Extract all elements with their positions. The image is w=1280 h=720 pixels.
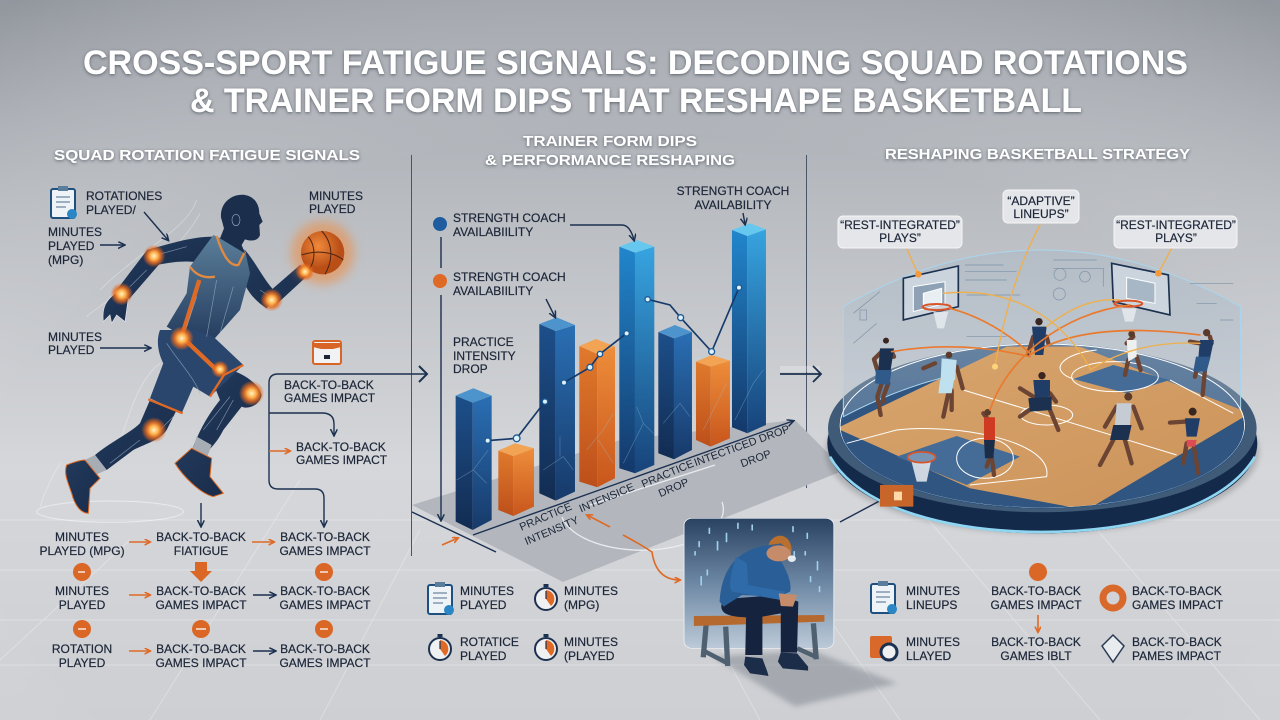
platform base xyxy=(826,343,1259,533)
head xyxy=(220,195,263,253)
joints xyxy=(143,245,165,267)
axis labels: INTECTICED DROP xyxy=(693,423,791,469)
legend: strength coach blue: STRENGTH COACH xyxy=(453,211,566,225)
label: minutes played ball xyxy=(309,189,363,216)
row 1: BACK-TO-BACK xyxy=(156,530,246,544)
label: back-to-back games impact 2: GAMES IMPACT xyxy=(296,453,388,467)
front arm xyxy=(242,250,310,308)
axis labels: DROP xyxy=(739,448,773,470)
arrow: hip xyxy=(100,347,150,349)
panel: bar chart xyxy=(412,223,845,582)
court floor xyxy=(837,344,1250,510)
panel dividers xyxy=(412,155,806,556)
callout: adaptive lineups xyxy=(1003,190,1079,223)
front leg xyxy=(175,370,262,497)
metric: rotatice played: PLAYED xyxy=(460,649,507,663)
screens xyxy=(853,260,1233,343)
metric: minutes lineups: MINUTES xyxy=(906,584,960,598)
rain drops xyxy=(695,523,820,592)
row 2: GAMES IMPACT xyxy=(155,598,247,612)
row 3: GAMES IMPACT xyxy=(279,656,371,670)
metric: minutes played: PLAYED xyxy=(460,598,507,612)
title: CROSS-SPORT FATIGUE SIGNALS: DECODING SQUAD ROTATIONS xyxy=(83,44,1188,82)
base badge xyxy=(880,485,913,507)
legend: strength coach blue xyxy=(433,211,566,239)
label: minutes played mpg xyxy=(48,225,102,267)
metric: minutes played: MINUTES xyxy=(460,584,514,598)
metric: minutes played: (PLAYED xyxy=(564,649,615,663)
axis labels: PRACTICE xyxy=(518,501,574,534)
label: minutes played hip xyxy=(48,330,102,357)
panel: court platform xyxy=(826,225,1259,533)
label: minutes played hip: MINUTES xyxy=(48,330,102,344)
axis labels: INTENSITY xyxy=(523,514,581,548)
metric: back-to-back with icon: GAMES IMPACT xyxy=(990,598,1082,612)
label: minutes played ball: MINUTES xyxy=(309,189,363,203)
arrow: top branch xyxy=(269,413,334,435)
heading: trainer form dips xyxy=(485,133,735,169)
metric: minutes lineups xyxy=(871,581,960,614)
metric: rotatice played: ROTATICE xyxy=(460,635,519,649)
panel: trainer card xyxy=(684,518,897,707)
icon: shield xyxy=(1102,635,1124,662)
metric: back-to-back right xyxy=(1132,584,1224,612)
orange arrows at floor xyxy=(442,515,610,545)
row 1: FIATIGUE xyxy=(174,544,228,558)
players xyxy=(874,318,1214,475)
label: minutes played mpg: PLAYED xyxy=(48,239,95,253)
metric: minutes played xyxy=(535,634,618,663)
callout: adaptive lineups: LINEUPS” xyxy=(1013,207,1069,221)
metric: minutes lineups: LINEUPS xyxy=(906,598,957,612)
label: back-to-back games impact 1: BACK-TO-BACK xyxy=(284,378,374,392)
front hoop xyxy=(908,452,936,482)
metric: back-to-back pames: PAMES IMPACT xyxy=(1132,649,1222,663)
legend: strength coach orange: AVAILABIILITY xyxy=(453,284,533,298)
metric: back-to-back games iblt: BACK-TO-BACK xyxy=(991,635,1081,649)
back leg xyxy=(66,400,177,513)
arrow: card to court xyxy=(840,497,887,522)
label: strength coach top: AVAILABILITY xyxy=(695,198,771,212)
callout: rest-integrated plays left: PLAYS” xyxy=(879,231,921,245)
legend connector xyxy=(440,237,442,520)
metric: back-to-back games iblt: GAMES IBLT xyxy=(1000,649,1072,663)
coach figure xyxy=(720,536,808,676)
axis labels: DROP xyxy=(657,477,691,500)
metric: back-to-back right: GAMES IMPACT xyxy=(1132,598,1224,612)
legend: strength coach orange: STRENGTH COACH xyxy=(453,270,566,284)
metric: back-to-back with icon xyxy=(990,563,1082,612)
metric: back-to-back right: BACK-TO-BACK xyxy=(1132,584,1222,598)
icon: clipboard rotations xyxy=(51,186,77,219)
label: back-to-back games impact 1 xyxy=(284,378,376,405)
trend line xyxy=(485,285,742,443)
chart axes xyxy=(412,421,793,552)
row 1: PLAYED (MPG) xyxy=(39,544,125,558)
callout: rest-integrated plays left xyxy=(838,216,962,248)
metric: minutes played xyxy=(428,582,514,615)
row 2: PLAYED xyxy=(59,598,106,612)
metric: rotatice played xyxy=(429,634,519,663)
bench xyxy=(694,615,824,666)
row 3: ROTATION xyxy=(52,642,112,656)
callout: rest-integrated plays right: PLAYS” xyxy=(1155,231,1197,245)
label: practice intensity drop: DROP xyxy=(453,362,488,376)
row 2: BACK-TO-BACK xyxy=(156,584,246,598)
metric: minutes mpg: (MPG) xyxy=(564,598,599,612)
icons row 3 xyxy=(73,620,333,638)
panel: middle metrics xyxy=(428,582,618,663)
metric: minutes llayed: MINUTES xyxy=(906,635,960,649)
ball xyxy=(291,221,354,284)
label: minutes played mpg: (MPG) xyxy=(48,253,83,267)
bench shadow xyxy=(713,650,897,707)
arrow: down xyxy=(1037,615,1039,632)
bars xyxy=(456,223,766,530)
title: & TRAINER FORM DIPS THAT RESHAPE BASKETBALL xyxy=(190,82,1082,120)
row 3 xyxy=(52,642,371,670)
label: strength coach top: STRENGTH COACH xyxy=(677,184,789,198)
row 1 xyxy=(39,530,371,558)
metric: minutes llayed: LLAYED xyxy=(906,649,951,663)
callout: rest-integrated plays right: “REST-INTEGRATED” xyxy=(1116,218,1236,232)
axis labels: INTENSICE xyxy=(577,481,636,515)
heading: trainer form dips: TRAINER FORM DIPS xyxy=(523,133,697,150)
label: rotations played: PLAYED/ xyxy=(86,203,136,217)
metric: minutes mpg: MINUTES xyxy=(564,584,618,598)
back arm xyxy=(103,237,213,323)
row 3: BACK-TO-BACK xyxy=(156,642,246,656)
axis labels xyxy=(518,423,791,548)
label: minutes played hip: PLAYED xyxy=(48,343,95,357)
icons row 1 xyxy=(73,562,333,582)
row 2: BACK-TO-BACK xyxy=(280,584,370,598)
label: practice intensity drop xyxy=(453,335,516,376)
label: practice intensity drop: PRACTICE xyxy=(453,335,514,349)
arrow: runner to list xyxy=(200,503,202,526)
glass wall xyxy=(843,250,1241,417)
icon: calendar board xyxy=(313,341,341,364)
arrow: orange branch xyxy=(269,450,290,452)
icon: orange ring xyxy=(1103,588,1123,608)
metric: back-to-back pames: BACK-TO-BACK xyxy=(1132,635,1222,649)
arrow: rotations to shoulder xyxy=(144,212,168,240)
axis labels: PRACTICE xyxy=(640,458,696,491)
metric: minutes played: MINUTES xyxy=(564,635,618,649)
callout: rest-integrated plays right xyxy=(1114,216,1237,248)
panel: left metrics flow xyxy=(39,530,371,670)
metric: back-to-back games iblt xyxy=(991,635,1081,663)
label: back-to-back games impact 2 xyxy=(296,440,388,467)
row 1: MINUTES xyxy=(55,530,109,544)
row 2: MINUTES xyxy=(55,584,109,598)
row 3: PLAYED xyxy=(59,656,106,670)
chart floor xyxy=(412,420,845,582)
backboard right xyxy=(1112,263,1170,322)
row 3: GAMES IMPACT xyxy=(155,656,247,670)
label: rotations played xyxy=(86,189,162,217)
label: rotations played: ROTATIONES xyxy=(86,189,162,203)
flow connector to chart xyxy=(269,366,427,526)
metric: minutes llayed xyxy=(870,635,960,663)
metric: back-to-back pames xyxy=(1132,635,1222,663)
label: back-to-back games impact 1: GAMES IMPACT xyxy=(284,391,376,405)
label: minutes played ball: PLAYED xyxy=(309,202,356,216)
label: strength coach top xyxy=(677,184,789,212)
heading: trainer form dips: & PERFORMANCE RESHAPING xyxy=(485,152,735,169)
label: practice intensity drop: INTENSITY xyxy=(453,349,516,363)
arrow: mpg xyxy=(100,244,124,246)
row 3: BACK-TO-BACK xyxy=(280,642,370,656)
legend: strength coach orange xyxy=(433,270,566,298)
heading: squad rotation: SQUAD ROTATION FATIGUE SIGNALS xyxy=(54,147,360,164)
metric: minutes mpg xyxy=(535,584,618,612)
card background xyxy=(684,518,834,648)
title xyxy=(83,44,1188,120)
row 1: GAMES IMPACT xyxy=(279,544,371,558)
row 2 xyxy=(55,584,371,612)
metric: back-to-back with icon: BACK-TO-BACK xyxy=(991,584,1081,598)
row 2: GAMES IMPACT xyxy=(279,598,371,612)
arrow: chart to court xyxy=(780,366,821,382)
play arcs xyxy=(892,225,1200,410)
backboard left xyxy=(903,266,958,328)
runner figure xyxy=(37,195,354,522)
heading: reshaping strategy: RESHAPING BASKETBALL STRATEGY xyxy=(885,146,1190,163)
panel: right metrics xyxy=(870,563,1224,663)
label: minutes played mpg: MINUTES xyxy=(48,225,102,239)
label: back-to-back games impact 2: BACK-TO-BACK xyxy=(296,440,386,454)
arrow: floor to trainer card xyxy=(623,535,680,580)
legend: strength coach blue: AVAILABIILITY xyxy=(453,225,533,239)
torso and shorts xyxy=(167,235,250,347)
callout: adaptive lineups: “ADAPTIVE” xyxy=(1007,194,1075,208)
row 1: BACK-TO-BACK xyxy=(280,530,370,544)
arrows to bars xyxy=(546,213,745,317)
callout: rest-integrated plays left: “REST-INTEGRATED” xyxy=(840,218,960,232)
